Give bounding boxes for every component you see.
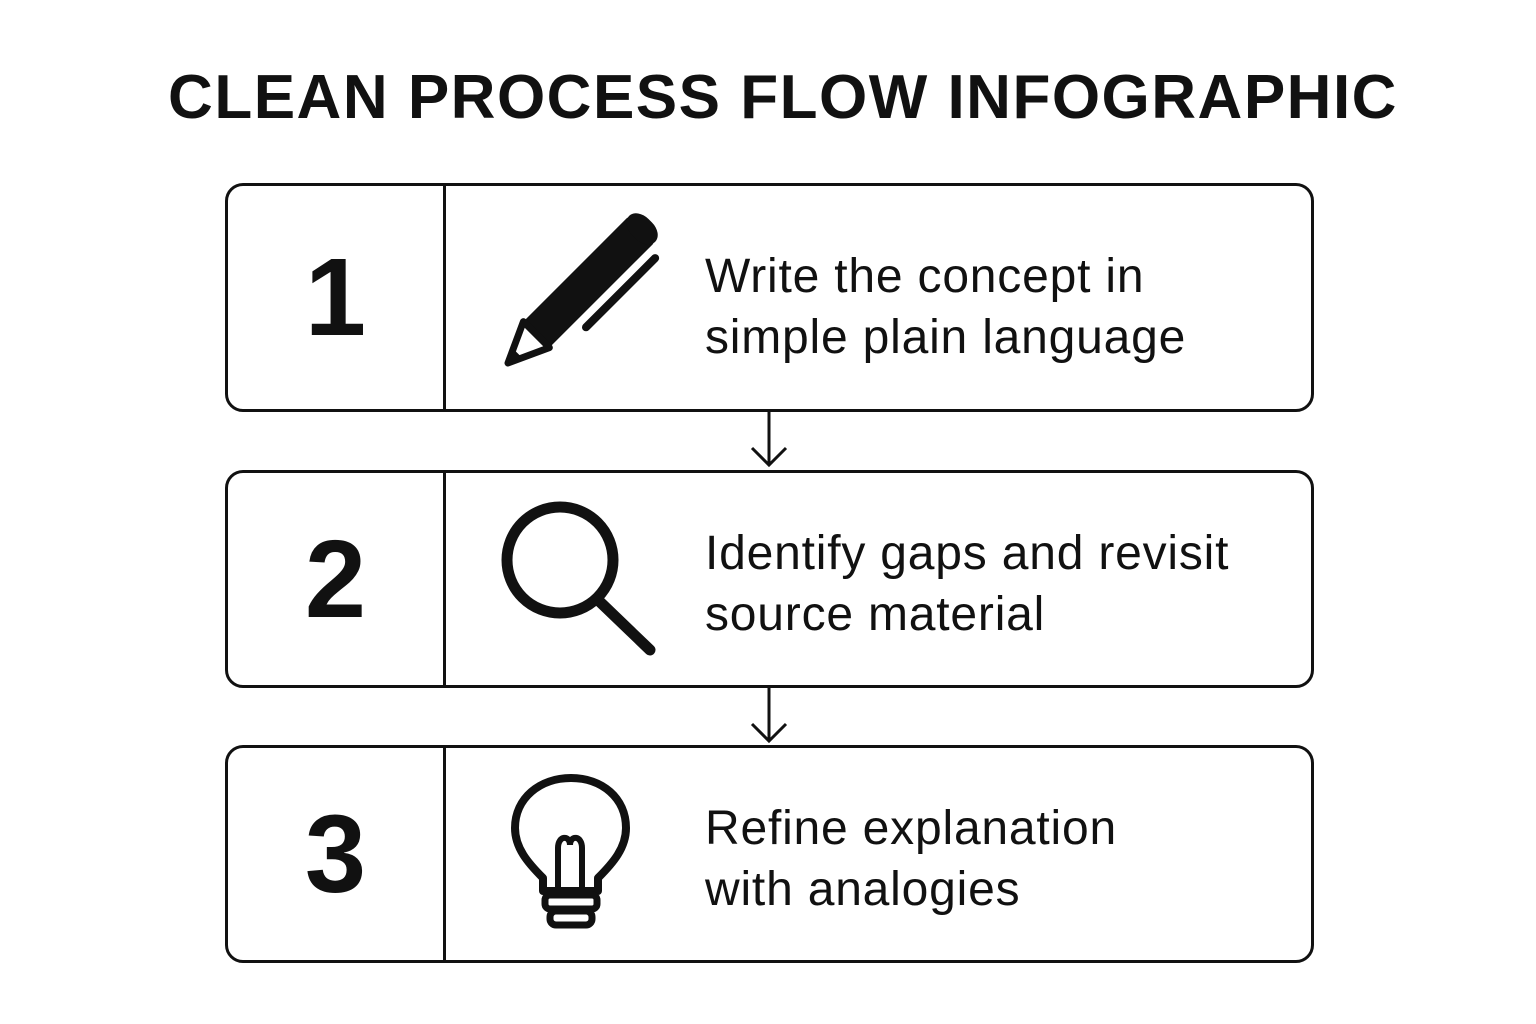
icon: magnifier — [502, 502, 656, 656]
icon: light bulb — [511, 774, 630, 928]
number 3 — [228, 748, 446, 960]
number 2 — [228, 473, 446, 685]
number 1: 1 — [305, 236, 366, 359]
title: CLEAN PROCESS FLOW INFOGRAPHIC — [168, 63, 1398, 132]
step 3 text: Refine explanation — [705, 802, 1117, 855]
step 3 text — [705, 802, 1117, 916]
panel: step 3 — [225, 745, 1314, 963]
step 2 text — [705, 527, 1229, 641]
number 3: 3 — [305, 792, 366, 916]
step 1 text — [705, 250, 1186, 364]
panel: step 2 — [225, 470, 1314, 688]
icon: pen — [504, 213, 660, 366]
arrow 2 — [751, 688, 787, 744]
panel: step 1 — [225, 183, 1314, 412]
step 3 text: with analogies — [705, 863, 1020, 916]
step 1 text: simple plain language — [705, 311, 1186, 364]
arrow 1 — [751, 412, 787, 468]
step 2 text: source material — [705, 588, 1045, 641]
step 2 text: Identify gaps and revisit — [705, 527, 1229, 580]
step 1 text: Write the concept in — [705, 250, 1144, 303]
number 2: 2 — [305, 518, 366, 640]
number 1 — [228, 186, 446, 409]
